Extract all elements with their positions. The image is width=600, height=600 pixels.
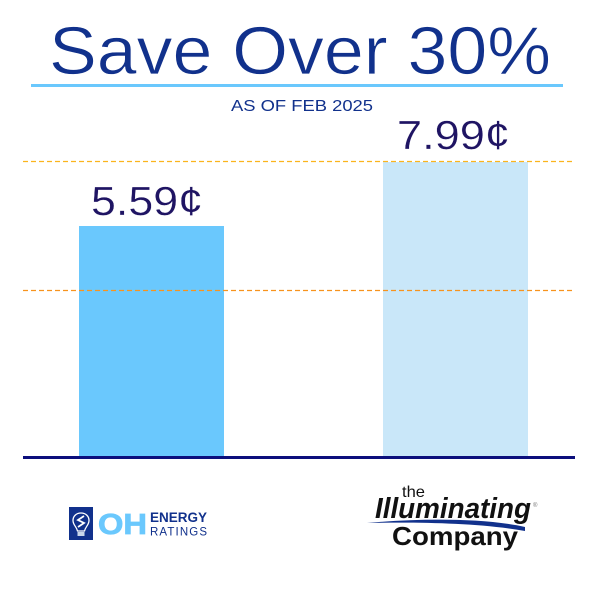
- logo text: Illuminating: Illuminating: [375, 493, 531, 525]
- title: Save Over 30%: [49, 13, 551, 89]
- logo swoosh: [367, 520, 525, 531]
- gridline: upper: [23, 160, 575, 162]
- chart baseline: [23, 456, 575, 459]
- title underline: [31, 84, 563, 87]
- logo text: OH: OH: [98, 509, 147, 541]
- logo text: ENERGY: ENERGY: [150, 510, 207, 525]
- gridline: middle: [23, 290, 575, 292]
- icon: light bulb: [69, 507, 93, 540]
- logo: OH Energy Ratings: [69, 507, 207, 541]
- logo text: Company: Company: [392, 521, 519, 551]
- logo: The Illuminating Company: [367, 484, 538, 551]
- logo text: the: the: [402, 484, 425, 501]
- logo text: RATINGS: RATINGS: [150, 526, 207, 538]
- value label: 5.59 cents: 5.59¢: [91, 178, 203, 224]
- bar: The Illuminating Company 7.99 cents: [383, 162, 528, 457]
- value label: 7.99 cents: 7.99¢: [397, 112, 510, 158]
- bar: OH Energy Ratings 5.59 cents: [79, 226, 224, 457]
- registered mark: ®: [533, 502, 538, 509]
- subtitle: date: AS OF FEB 2025: [231, 98, 373, 115]
